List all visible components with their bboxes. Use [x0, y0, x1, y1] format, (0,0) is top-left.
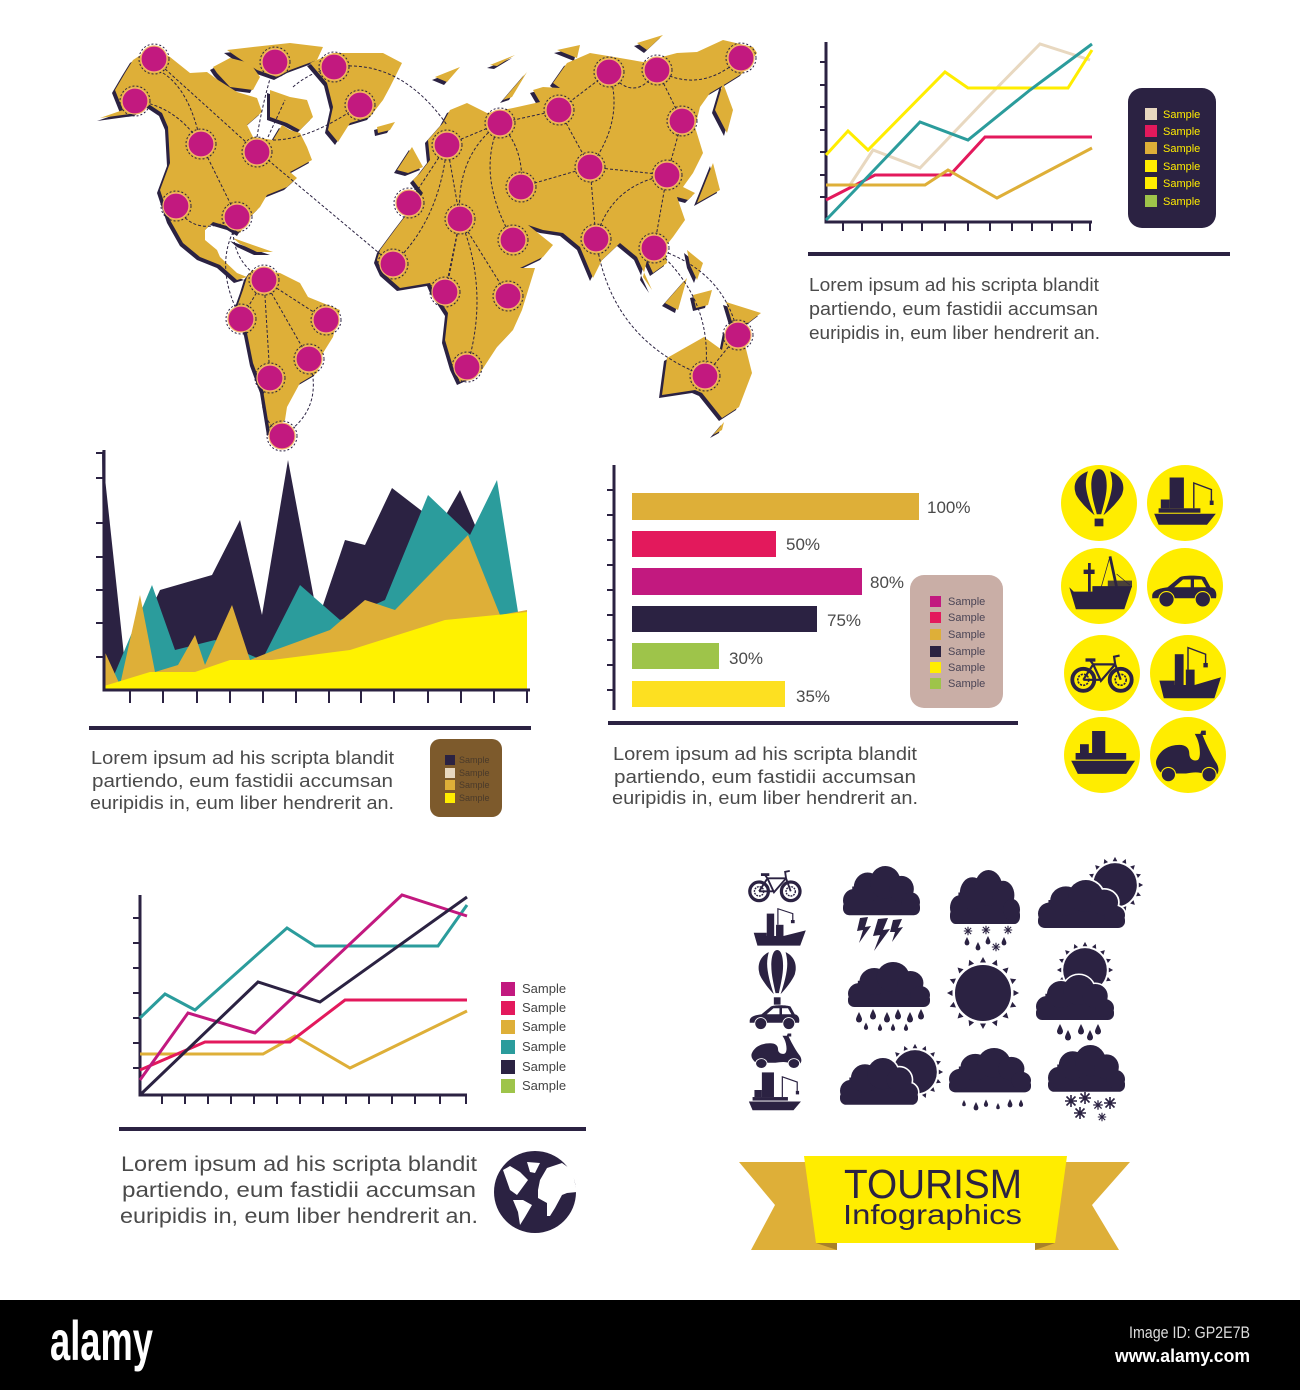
- icon: ferry: [1064, 717, 1140, 793]
- text block: bar chart: [612, 744, 918, 808]
- footer url: www.alamy.com: [1114, 1346, 1250, 1366]
- text block: lower left: partiendo, eum fastidii accumsan: [122, 1179, 476, 1202]
- legend: area chart: Sample: [459, 793, 490, 803]
- text block: area chart: euripidis in, eum liber hendrerit an.: [90, 793, 394, 813]
- title ribbon: [739, 1156, 1130, 1250]
- icon: scooter: [1150, 717, 1226, 793]
- title text: Infographics: [843, 1199, 1022, 1230]
- legend: bar chart: Sample: [948, 596, 985, 608]
- bar chart: [607, 465, 970, 710]
- icon: ship small: [749, 1072, 801, 1110]
- text block: lower left: [120, 1153, 478, 1228]
- text block: top right: euripidis in, eum liber hendrerit an.: [809, 323, 1100, 343]
- icon: sun: [947, 957, 1019, 1029]
- footer logo: alamy: [50, 1309, 153, 1372]
- transport icons on yellow circles: [1061, 465, 1226, 793]
- icon: globe: [494, 1151, 577, 1233]
- icon: freighter small: [754, 909, 806, 946]
- legend: top right: Sample: [1163, 196, 1200, 208]
- legend: top right: Sample: [1163, 143, 1200, 155]
- ribbon front: [804, 1156, 1067, 1243]
- bar chart: 50%: [786, 535, 820, 554]
- bar chart: 75%: [827, 611, 861, 630]
- legend: area chart: [430, 739, 502, 817]
- continents: [100, 35, 761, 435]
- weather icons: [840, 857, 1143, 1121]
- legend: area chart: Sample: [459, 768, 490, 778]
- line chart: top right: [820, 42, 1092, 231]
- title text: [843, 1161, 1022, 1230]
- legend: bar chart: Sample: [948, 629, 985, 641]
- bar chart: 30%: [729, 649, 763, 668]
- node dashed rings: [120, 43, 756, 451]
- legend: top right: [1128, 88, 1216, 228]
- icon: heavy rain cloud: [848, 962, 930, 1031]
- text block: area chart: [90, 748, 394, 813]
- legend: lower left: Sample: [522, 1078, 566, 1093]
- legend: lower left: Sample: [522, 1059, 566, 1074]
- legend: bar chart: Sample: [948, 646, 985, 658]
- icon: sun cloud with rain: [1036, 942, 1114, 1040]
- legend: area chart: Sample: [459, 755, 490, 765]
- text block: lower left: euripidis in, eum liber hendrerit an.: [120, 1205, 478, 1228]
- legend: lower left: Sample: [522, 1000, 566, 1015]
- icon: car: [1147, 548, 1223, 624]
- icon: sun behind cloud lower: [840, 1044, 943, 1105]
- icon: bicycle small: [750, 871, 800, 901]
- footer bar: [0, 1300, 1300, 1390]
- footer image id: Image ID: GP2E7B: [1129, 1323, 1250, 1342]
- dashed route lines: [135, 58, 741, 436]
- text block: bar chart: euripidis in, eum liber hendrerit an.: [612, 788, 918, 808]
- legend: bar chart: Sample: [948, 678, 985, 690]
- legend: bar chart: Sample: [948, 662, 985, 674]
- legend: bar chart: [910, 575, 1003, 708]
- icon: fishing boat: [1061, 548, 1137, 624]
- legend: top right: Sample: [1163, 178, 1200, 190]
- text block: bar chart: partiendo, eum fastidii accumsan: [614, 767, 916, 787]
- text block: top right: partiendo, eum fastidii accumsan: [809, 299, 1098, 319]
- legend: area chart: Sample: [459, 780, 490, 790]
- bar chart: 100%: [927, 498, 970, 517]
- text block: area chart: Lorem ipsum ad his scripta blandit: [91, 748, 394, 768]
- bar chart: 35%: [796, 687, 830, 706]
- legend: lower left: Sample: [522, 981, 566, 996]
- text block: area chart: partiendo, eum fastidii accumsan: [92, 771, 393, 791]
- text block: top right: Lorem ipsum ad his scripta blandit: [809, 275, 1099, 295]
- legend: bar chart: Sample: [948, 612, 985, 624]
- legend: lower left: Sample: [522, 1019, 566, 1034]
- icon: freighter: [1150, 635, 1226, 711]
- text block: bar chart: Lorem ipsum ad his scripta blandit: [613, 744, 917, 764]
- legend: lower left: [501, 981, 566, 1093]
- text block: lower left: Lorem ipsum ad his scripta blandit: [121, 1153, 477, 1176]
- icon: sun behind cloud: [1038, 857, 1143, 928]
- icon: balloon small: [759, 950, 796, 1005]
- legend: top right: Sample: [1163, 161, 1200, 173]
- ribbon tails: [739, 1162, 1130, 1250]
- legend: top right: Sample: [1163, 126, 1200, 138]
- icon: hot air balloon: [1061, 465, 1137, 541]
- legend: top right: Sample: [1163, 109, 1200, 121]
- icon: scooter small: [751, 1034, 801, 1068]
- icon: sleet cloud: [950, 870, 1020, 951]
- title text: TOURISM: [844, 1161, 1022, 1207]
- location nodes: [122, 45, 754, 449]
- text block: top right: [809, 275, 1100, 343]
- area chart: [96, 450, 530, 703]
- legend: lower left: Sample: [522, 1039, 566, 1054]
- bar chart: 80%: [870, 573, 904, 592]
- icon: car small: [750, 1005, 799, 1030]
- icon: cargo ship with crane: [1147, 465, 1223, 541]
- line chart: lower left: [133, 895, 467, 1104]
- icon: snow cloud: [1048, 1045, 1125, 1121]
- icon: light rain cloud: [949, 1048, 1031, 1110]
- world map: [97, 35, 761, 451]
- icon: storm cloud: [843, 866, 920, 951]
- left column of transport icons: [749, 871, 806, 1110]
- icon: bicycle: [1064, 635, 1140, 711]
- map shadow: [97, 38, 758, 438]
